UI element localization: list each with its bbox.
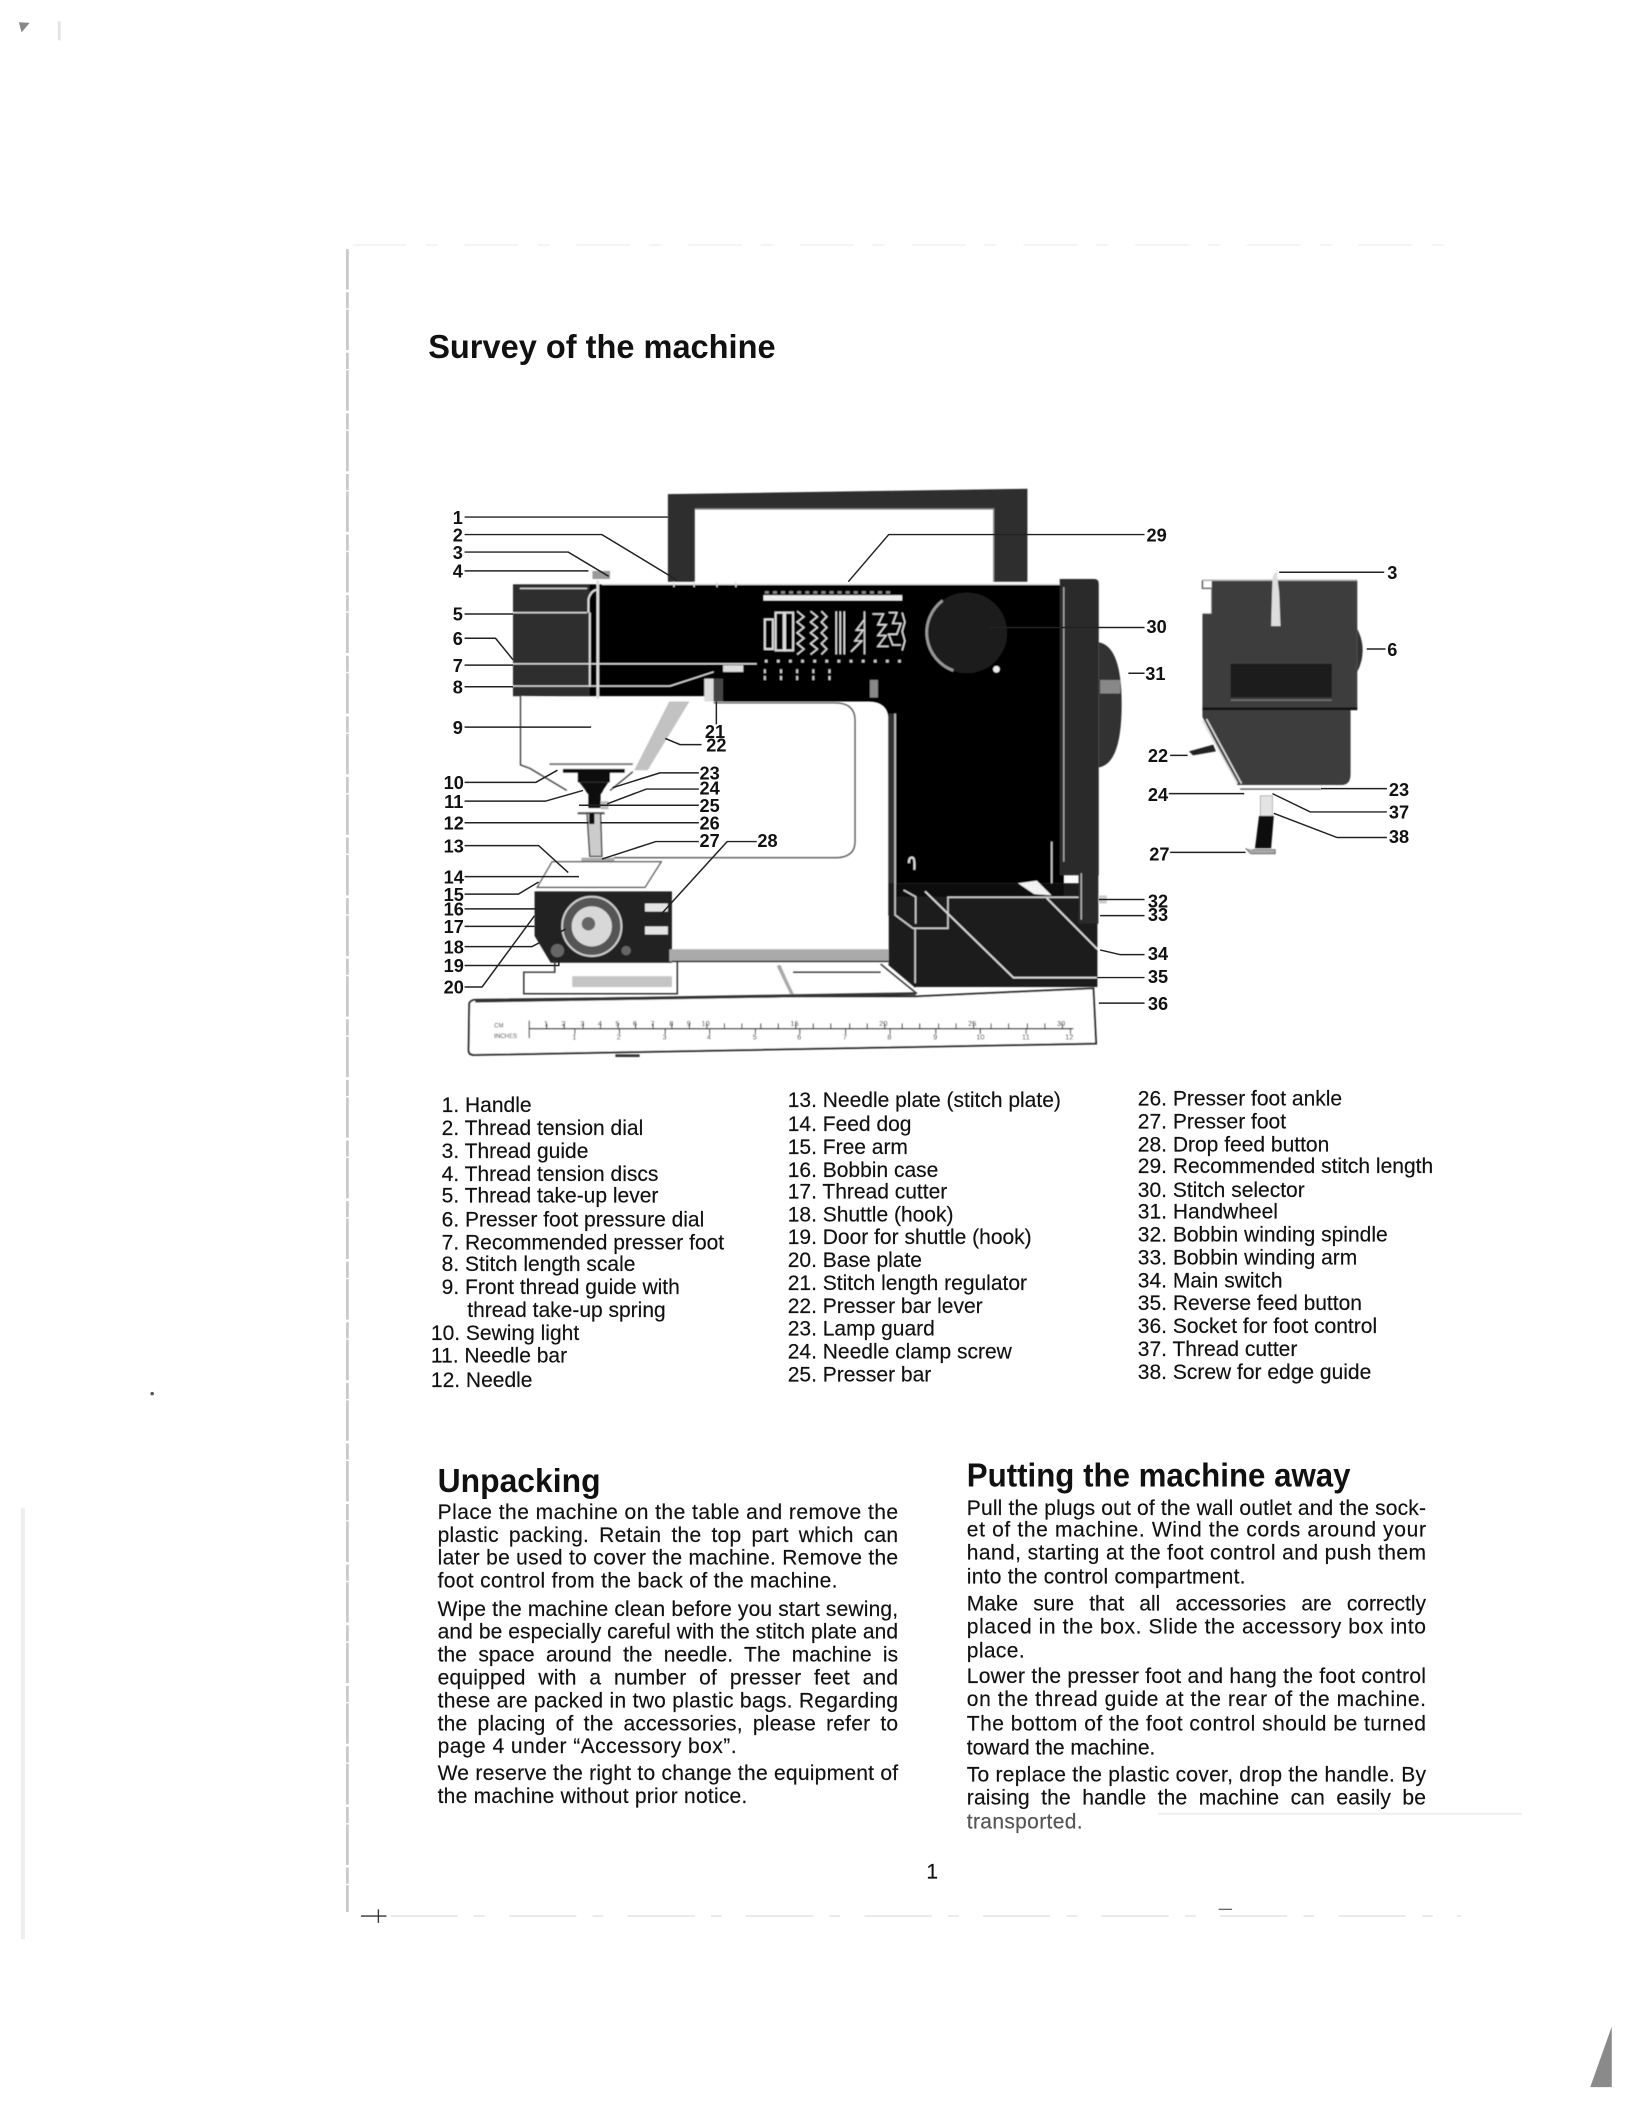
base plate with ruler: 4 xyxy=(707,1033,711,1042)
parts list, column 2: 23. Lamp guard xyxy=(788,1318,935,1341)
parts list, column 2: 24. Needle clamp screw xyxy=(788,1341,1013,1364)
text block: Putting the machine away: toward the machine. xyxy=(967,1737,1155,1760)
numbered callouts, side view: 6 xyxy=(1387,640,1397,660)
parts list, column 2: 21. Stitch length regulator xyxy=(788,1272,1027,1295)
numbered callouts, front view: 13 xyxy=(444,836,464,856)
numbered callouts, front view: 12 xyxy=(444,813,464,833)
numbered callouts, front view: 35 xyxy=(1148,967,1168,987)
numbered callouts, front view: 20 xyxy=(444,978,464,998)
parts list, column 2: 18. Shuttle (hook) xyxy=(788,1203,953,1226)
numbered callouts, front view: 30 xyxy=(1147,617,1167,637)
text block: Putting the machine away: placed in the box. Slide the accessory box into xyxy=(967,1615,1426,1638)
base plate with ruler: 9 xyxy=(687,1019,691,1028)
base plate with ruler: 7 xyxy=(650,1019,655,1028)
numbered callouts, front view: 31 xyxy=(1145,664,1165,684)
thread guide and take-up lever xyxy=(588,571,610,757)
base plate with ruler: 20 xyxy=(879,1019,888,1028)
parts list, column 1: 10. Sewing light xyxy=(431,1322,579,1345)
text block: Putting the machine away: raising the handle the machine can easily be xyxy=(967,1786,1426,1809)
text block: Putting the machine away xyxy=(967,1497,1426,1834)
parts list, column 2: 19. Door for shuttle (hook) xyxy=(788,1226,1032,1249)
text block: Unpacking: plastic packing. Retain the top part which can xyxy=(438,1524,898,1547)
text block: Putting the machine away: transported. xyxy=(967,1811,1083,1834)
parts list, column 1: thread take-up spring xyxy=(467,1299,666,1322)
base plate with ruler: 6 xyxy=(797,1033,801,1042)
base plate with ruler: 2 xyxy=(617,1033,621,1042)
parts list, column 3 xyxy=(1138,1087,1433,1384)
page number: 1 xyxy=(926,1860,938,1883)
base plate with ruler: 3 xyxy=(580,1019,584,1028)
base plate with ruler: 5 xyxy=(615,1019,619,1028)
numbered callouts, front view: 15 xyxy=(444,885,464,905)
parts list, column 1: 11. Needle bar xyxy=(431,1345,567,1368)
numbered callouts, side view xyxy=(1148,563,1409,864)
handle xyxy=(668,489,1027,582)
parts list, column 1: 5. Thread take-up lever xyxy=(442,1184,658,1207)
diagram: sewing machine front view xyxy=(469,489,1122,1057)
text block: Putting the machine away: To replace the plastic cover, drop the handle. By xyxy=(967,1763,1426,1786)
numbered callouts, front view: 10 xyxy=(444,773,464,793)
numbered callouts, front view: 18 xyxy=(444,937,464,957)
throat outline xyxy=(614,703,855,858)
parts list, column 3: 34. Main switch xyxy=(1138,1269,1283,1292)
numbered callouts, front view: 8 xyxy=(453,677,463,697)
parts list, column 3: 32. Bobbin winding spindle xyxy=(1138,1223,1388,1246)
numbered callouts, front view: 4 xyxy=(453,562,463,582)
text block: Putting the machine away: The bottom of the foot control should be turned xyxy=(967,1712,1426,1735)
parts list, column 3: 30. Stitch selector xyxy=(1138,1179,1305,1202)
base plate with ruler: 7 xyxy=(843,1033,847,1042)
numbered callouts, front view: 1 xyxy=(453,508,463,528)
parts list, column 3: 28. Drop feed button xyxy=(1138,1133,1329,1156)
leader lines, front view xyxy=(465,517,1145,1003)
text block: Unpacking: equipped with a number of presser feet and xyxy=(438,1666,898,1689)
numbered callouts, front view: 7 xyxy=(453,656,463,676)
parts list, column 1: 8. Stitch length scale xyxy=(442,1253,635,1276)
text block: Unpacking: We reserve the right to change the equipment of xyxy=(438,1762,898,1785)
parts list, column 2: 20. Base plate xyxy=(788,1249,922,1272)
base plate with ruler: 9 xyxy=(933,1033,937,1042)
parts list, column 1: 12. Needle xyxy=(431,1369,532,1392)
needle plate xyxy=(537,862,661,887)
numbered callouts, front view: 33 xyxy=(1148,905,1168,925)
text block: Unpacking: Place the machine on the table and remove the xyxy=(438,1501,898,1524)
parts list, column 1 xyxy=(431,1094,724,1392)
base plate with ruler: CM xyxy=(494,1023,504,1029)
text block: Unpacking: the machine without prior notice. xyxy=(438,1785,747,1808)
numbered callouts, front view: 21 xyxy=(705,722,725,742)
text block: Unpacking: foot control from the back of the machine. xyxy=(438,1570,838,1593)
parts list, column 2: 16. Bobbin case xyxy=(788,1159,938,1182)
parts list, column 3: 36. Socket for foot control xyxy=(1138,1315,1377,1338)
base plate with ruler: 12 xyxy=(1065,1033,1073,1042)
parts list, column 1: 2. Thread tension dial xyxy=(442,1117,643,1140)
numbered callouts, front view: 36 xyxy=(1148,994,1168,1014)
parts list, column 2: 13. Needle plate (stitch plate) xyxy=(788,1089,1061,1112)
leader lines, side view xyxy=(1169,572,1387,852)
numbered callouts, front view: 29 xyxy=(1147,525,1167,545)
base plate with ruler: 2 xyxy=(562,1019,566,1028)
text block: Putting the machine away: place. xyxy=(967,1640,1025,1663)
text block: Putting the machine away: into the control compartment. xyxy=(967,1565,1246,1588)
text block: Unpacking: the space around the needle. The machine is xyxy=(438,1644,898,1667)
numbered callouts, front view: 5 xyxy=(453,605,463,625)
numbered callouts, front view: 6 xyxy=(453,629,463,649)
free arm xyxy=(524,949,917,1002)
text block: Unpacking: the placing of the accessories, please refer to xyxy=(438,1712,898,1735)
text block: Unpacking: page 4 under “Accessory box”. xyxy=(438,1735,737,1758)
text block: Putting the machine away: on the thread guide at the rear of the machine. xyxy=(967,1688,1426,1711)
numbered callouts, front view: 24 xyxy=(700,778,720,798)
parts list, column 1: 3. Thread guide xyxy=(442,1140,588,1163)
text block: Putting the machine away: hand, starting at the foot control and push them xyxy=(967,1541,1426,1564)
parts list, column 3: 37. Thread cutter xyxy=(1138,1338,1297,1361)
numbered callouts, front view: 2 xyxy=(453,525,463,545)
numbered callouts, front view: 16 xyxy=(444,900,464,920)
base plate with ruler: 15 xyxy=(790,1019,799,1028)
text block: Unpacking xyxy=(438,1501,898,1808)
numbered callouts, front view: 9 xyxy=(453,718,463,738)
base plate with ruler: 1 xyxy=(544,1019,548,1028)
diagram: sewing machine side view xyxy=(1189,570,1363,854)
parts list, column 1: 4. Thread tension discs xyxy=(442,1163,658,1186)
parts list, column 1: 9. Front thread guide with xyxy=(442,1276,680,1299)
parts list, column 3: 35. Reverse feed button xyxy=(1138,1292,1362,1315)
parts list, column 1: 6. Presser foot pressure dial xyxy=(442,1209,704,1232)
numbered callouts, front view: 14 xyxy=(444,867,464,887)
parts list, column 2: 25. Presser bar xyxy=(788,1364,931,1387)
bobbin compartment xyxy=(535,891,672,963)
parts list, column 3: 31. Handwheel xyxy=(1138,1201,1278,1224)
base plate with ruler: 25 xyxy=(968,1019,976,1028)
text block: Unpacking: these are packed in two plastic bags. Regarding xyxy=(438,1689,898,1712)
text block: Unpacking: and be especially careful with the stitch plate and xyxy=(438,1621,898,1644)
title: Survey of the machine xyxy=(428,329,776,366)
base plate with ruler: 3 xyxy=(662,1033,667,1042)
numbered callouts, front view: 26 xyxy=(700,813,720,833)
base plate with ruler: 10 xyxy=(976,1033,984,1042)
parts list, column 2 xyxy=(788,1089,1061,1387)
numbered callouts, front view: 3 xyxy=(453,543,463,563)
base plate with ruler: 8 xyxy=(669,1019,673,1028)
stitch selector dial xyxy=(926,592,1007,673)
numbered callouts, side view: 24 xyxy=(1148,785,1168,805)
parts list, column 1: 7. Recommended presser foot xyxy=(442,1232,724,1255)
parts list, column 3: 38. Screw for edge guide xyxy=(1138,1361,1371,1384)
handwheel xyxy=(1099,642,1122,768)
numbered callouts, front view: 23 xyxy=(700,764,720,784)
base plate with ruler: 4 xyxy=(598,1019,602,1028)
numbered callouts, side view: 37 xyxy=(1389,803,1409,823)
base plate with ruler: 1 xyxy=(572,1033,576,1042)
parts list, column 2: 17. Thread cutter xyxy=(788,1180,947,1203)
base plate with ruler: 10 xyxy=(702,1019,710,1028)
base plate with ruler: 30 xyxy=(1057,1019,1065,1028)
parts list, column 3: 27. Presser foot xyxy=(1138,1110,1286,1133)
text block: Putting the machine away: Pull the plugs out of the wall outlet and the sock- xyxy=(967,1497,1426,1520)
accessory box xyxy=(889,714,1107,987)
text block: Unpacking: Wipe the machine clean before you start sewing, xyxy=(438,1598,898,1621)
numbered callouts, front view: 11 xyxy=(444,792,463,812)
numbered callouts, front view: 19 xyxy=(444,956,464,976)
numbered callouts, front view: 27 xyxy=(700,831,720,851)
heading: Unpacking: Unpacking xyxy=(438,1463,601,1500)
parts list, column 2: 22. Presser bar lever xyxy=(788,1295,983,1318)
lower head and lamp xyxy=(521,696,689,790)
parts list, column 2: 14. Feed dog xyxy=(788,1113,911,1136)
numbered callouts, front view: 25 xyxy=(700,796,720,816)
base plate with ruler: 5 xyxy=(753,1033,757,1042)
stitch selector panel xyxy=(704,592,905,702)
parts list, column 3: 33. Bobbin winding arm xyxy=(1138,1246,1357,1269)
parts list, column 1: 1. Handle xyxy=(442,1094,532,1117)
numbered callouts, front view: 28 xyxy=(757,831,778,851)
numbered callouts, front view: 34 xyxy=(1148,944,1168,964)
numbered callouts, front view: 32 xyxy=(1148,892,1168,912)
parts list, column 3: 26. Presser foot ankle xyxy=(1138,1087,1342,1110)
base plate with ruler: INCHES xyxy=(494,1034,517,1040)
numbered callouts, side view: 27 xyxy=(1149,844,1169,864)
needle and presser foot xyxy=(578,782,617,875)
numbered callouts, front view: 17 xyxy=(444,917,464,937)
numbered callouts, side view: 38 xyxy=(1389,827,1409,847)
text block: Unpacking: later be used to cover the machine. Remove the xyxy=(438,1547,898,1570)
text block: Putting the machine away: et of the machine. Wind the cords around your xyxy=(967,1518,1426,1541)
numbered callouts, side view: 22 xyxy=(1148,746,1168,766)
parts list, column 3: 29. Recommended stitch length xyxy=(1138,1155,1433,1178)
machine arm and column xyxy=(513,579,1099,916)
base plate with ruler: 11 xyxy=(1022,1033,1030,1042)
numbered callouts, side view: 3 xyxy=(1387,563,1397,583)
heading: Putting the machine away: Putting the machine away xyxy=(967,1458,1351,1495)
numbered callouts, front view xyxy=(444,508,1168,1014)
numbered callouts, front view: 22 xyxy=(706,735,726,755)
text block: Putting the machine away: Lower the presser foot and hang the foot control xyxy=(967,1665,1426,1688)
parts list, column 2: 15. Free arm xyxy=(788,1136,908,1159)
base plate with ruler: 8 xyxy=(887,1033,891,1042)
base plate with ruler: 6 xyxy=(633,1019,637,1028)
text block: Putting the machine away: Make sure that all accessories are correctly xyxy=(967,1592,1426,1615)
numbered callouts, side view: 23 xyxy=(1389,780,1409,800)
base plate with ruler xyxy=(469,988,1096,1057)
